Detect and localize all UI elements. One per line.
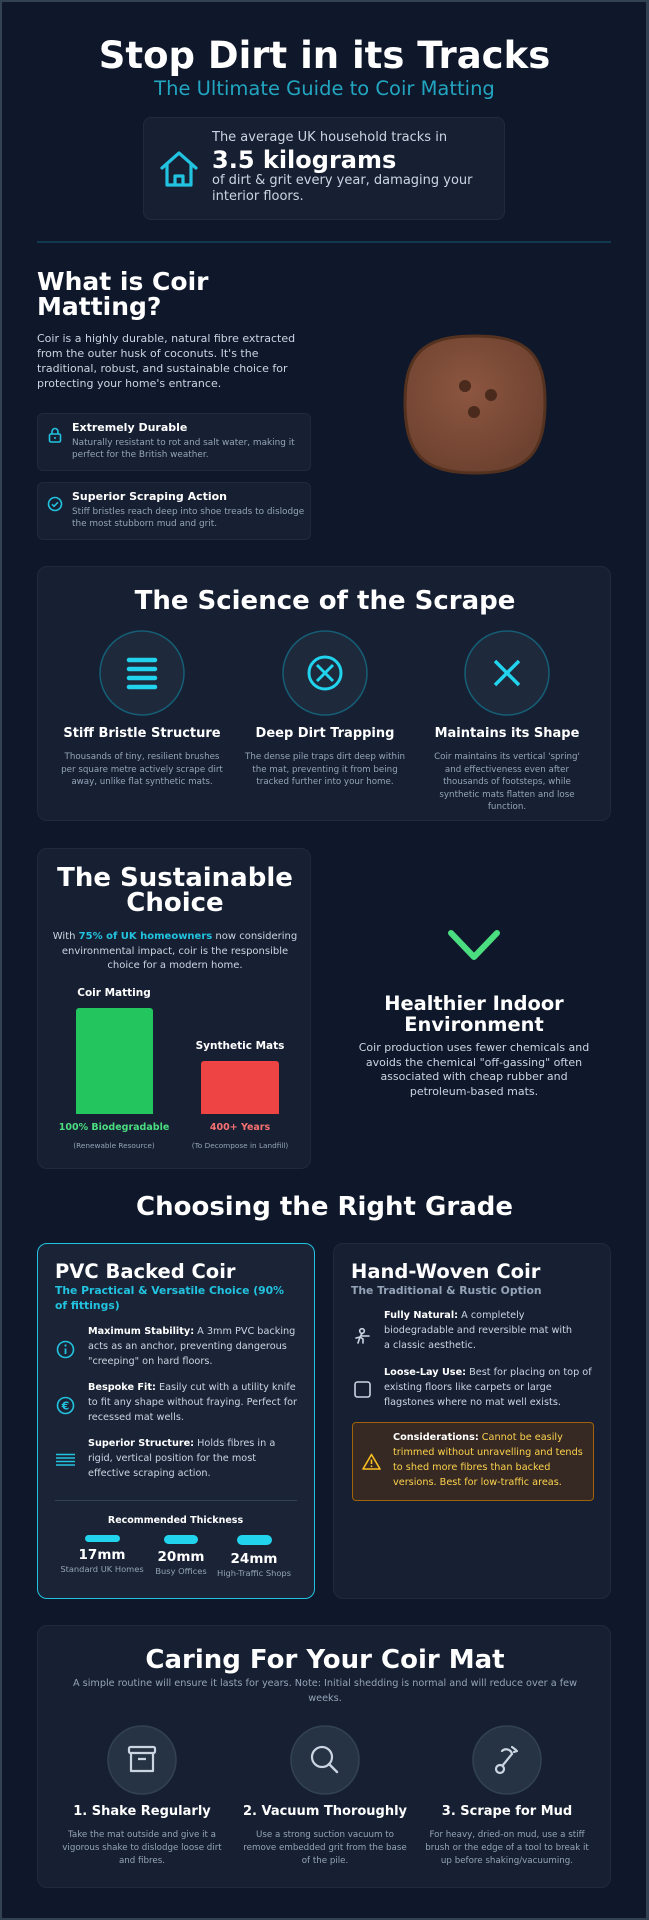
- thickness chart: Busy Offices: [155, 1566, 207, 1576]
- healthier environment: Environment: [404, 1013, 544, 1036]
- icon: lock: [48, 428, 62, 443]
- card: scraping: [37, 482, 311, 540]
- heading: what is coir: [37, 267, 208, 321]
- heading: The Sustainable: [57, 863, 293, 893]
- panel: caring: A simple routine will ensure it lasts for years. Note: Initial shedding is normal and will reduce over a few weeks.: [73, 1678, 577, 1704]
- bar chart: (To Decompose in Landfill): [192, 1141, 288, 1150]
- panel: caring: [37, 1625, 611, 1888]
- panel: sustainable choice: [37, 848, 311, 1169]
- heading: what is coir: Matting?: [37, 292, 161, 321]
- step 3: 3. Scrape for Mud: [442, 1804, 572, 1819]
- item: trapping: [245, 630, 405, 787]
- subtitle: The Ultimate Guide to Coir Matting: [154, 77, 495, 100]
- step 1: [62, 1725, 222, 1866]
- item: bristle: [61, 630, 223, 787]
- step 1: 1. Shake Regularly: [73, 1804, 211, 1819]
- icon: check circle: [48, 496, 62, 512]
- thickness chart: 20mm: [158, 1549, 204, 1565]
- item: trapping: Deep Dirt Trapping: [256, 726, 394, 741]
- heading: Choice: [126, 888, 224, 918]
- icon: bristles: [99, 630, 185, 716]
- item: structure: Superior Structure: Holds fibres in a rigid, vertical position for the most effective scraping action.: [88, 1438, 275, 1479]
- item: shape: Maintains its Shape: [435, 726, 579, 741]
- panel: science of the scrape: [37, 566, 611, 821]
- icon: coconut: [404, 334, 546, 474]
- thickness chart: Recommended Thickness: [108, 1515, 243, 1526]
- bar chart: 400+ Years: [210, 1122, 270, 1133]
- heading: choosing grade: Choosing the Right Grade: [136, 1192, 513, 1222]
- card: durable: Naturally resistant to rot and salt water, making it perfect for the British weather.: [72, 438, 295, 460]
- stat text: The average UK household tracks in of dirt & grit every year, damaging your interior floors.: [212, 130, 473, 204]
- item: bristle: Thousands of tiny, resilient brushes per square metre actively scrape dirt away, unlike flat synthetic mats.: [61, 752, 223, 787]
- step 2: [243, 1725, 407, 1866]
- callout: considerations: Considerations: Cannot be easily trimmed without unravelling and tends to shed more fibres than backed versions. Best for low-traffic areas.: [393, 1432, 583, 1488]
- icon: check: [448, 930, 500, 960]
- step 2: 2. Vacuum Thoroughly: [243, 1804, 407, 1819]
- panel: hand-woven coir: [333, 1243, 611, 1599]
- panel: pvc backed coir: [37, 1243, 315, 1599]
- panel: pvc backed coir: PVC Backed Coir: [55, 1260, 236, 1283]
- icon: x: [464, 630, 550, 716]
- item: shape: Coir maintains its vertical 'spring' and effectiveness even after thousands of footsteps, while synthetic mats flatten and lose function.: [434, 752, 580, 812]
- stat text: 3.5 kilograms: [212, 146, 396, 174]
- thickness chart: High-Traffic Shops: [217, 1568, 291, 1578]
- card: durable: Extremely Durable: [72, 421, 187, 434]
- panel: caring: Caring For Your Coir Mat: [145, 1645, 505, 1675]
- healthier environment: Healthier Indoor: [384, 992, 564, 1015]
- item: shape: [434, 630, 580, 812]
- card: scraping: Stiff bristles reach deep into shoe treads to dislodge the most stubborn mud and grit.: [72, 506, 304, 529]
- heading: [57, 863, 293, 918]
- stat box: [143, 117, 505, 220]
- callout: considerations: [352, 1422, 594, 1501]
- item: bristle: Stiff Bristle Structure: [63, 726, 221, 741]
- text: With 75% of UK homeowners now considering environmental impact, coir is the responsible choice for a modern home.: [53, 931, 297, 971]
- step 2: Use a strong suction vacuum to remove embedded grit from the base of the pile.: [243, 1830, 407, 1866]
- item: bespoke: €: [61, 1400, 69, 1412]
- card: durable: [37, 413, 311, 471]
- thickness chart: 17mm: [79, 1547, 125, 1563]
- card: scraping: Superior Scraping Action: [72, 490, 227, 503]
- panel: pvc backed coir: The Practical & Versatile Choice (90% of fittings): [55, 1284, 284, 1312]
- bar chart: Coir Matting: [77, 987, 151, 999]
- item: trapping: The dense pile traps dirt deep within the mat, preventing it from being tracked further into your home.: [245, 752, 405, 787]
- icon: circle x: [282, 630, 368, 716]
- bar chart: Synthetic Mats: [196, 1040, 284, 1052]
- heading: what is coir: What is Coir: [37, 267, 208, 296]
- item: natural: Fully Natural: A completely biodegradable and reversible mat with a classic aesthetic.: [384, 1310, 572, 1351]
- panel: hand-woven coir: Hand-Woven Coir: [351, 1260, 540, 1283]
- healthier environment: Coir production uses fewer chemicals and avoids the chemical "off-gassing" often associated with cheap rubber and petroleum-based mats.: [359, 1041, 589, 1098]
- step 1: Take the mat outside and give it a vigorous shake to dislodge loose dirt and fibres.: [62, 1830, 222, 1866]
- thickness chart: Standard UK Homes: [60, 1564, 144, 1574]
- item: bespoke: Bespoke Fit: Easily cut with a utility knife to fit any shape without fraying. Perfect for recessed mat wells.: [88, 1382, 297, 1423]
- thickness chart: [60, 1515, 291, 1578]
- paragraph: Coir is a highly durable, natural fibre extracted from the outer husk of coconuts. It's the traditional, robust, and sustainable choice for protecting your home's entrance.: [37, 332, 295, 390]
- step 3: [425, 1725, 589, 1866]
- heading: The Science of the Scrape: [135, 586, 515, 616]
- thickness chart: 24mm: [231, 1551, 277, 1567]
- title: Stop Dirt in its Tracks: [99, 34, 550, 77]
- icon: house: [160, 151, 198, 187]
- item: stability: Maximum Stability: A 3mm PVC backing acts as an anchor, preventing dangerous "creeping" on hard floors.: [88, 1326, 295, 1367]
- bar chart: 100% Biodegradable: [59, 1122, 169, 1133]
- item: loose-lay: Loose-Lay Use: Best for placing on top of existing floors like carpets or large flagstones where no mat well exists.: [384, 1367, 592, 1408]
- bar chart: (Renewable Resource): [73, 1141, 155, 1150]
- step 3: For heavy, dried-on mud, use a stiff brush or the edge of a tool to break it up before shaking/vacuuming.: [425, 1830, 589, 1866]
- panel: hand-woven coir: The Traditional & Rustic Option: [351, 1284, 542, 1297]
- healthier environment: [359, 992, 589, 1098]
- bar chart: [59, 987, 288, 1150]
